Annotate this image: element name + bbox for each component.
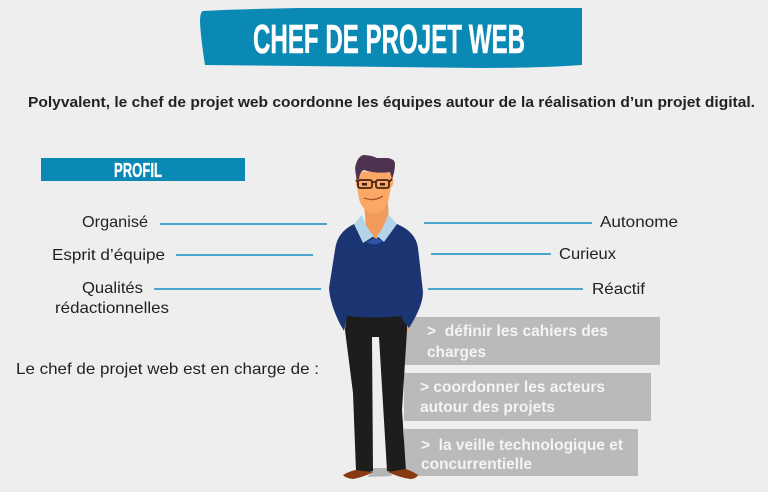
task box: veille technologique: concurrentielle bbox=[421, 456, 532, 473]
subtitle: Polyvalent, le chef de projet web coordonne les équipes autour de la réalisation d’un projet digital. bbox=[28, 94, 755, 111]
text: responsibilities intro: Le chef de projet web est en charge de : bbox=[16, 361, 319, 378]
smile bbox=[364, 196, 383, 200]
hair bbox=[355, 155, 395, 180]
title banner bbox=[200, 8, 582, 68]
sweater bbox=[329, 224, 423, 331]
trousers bbox=[345, 312, 407, 472]
label: Esprit d'équipe: Esprit d’équipe bbox=[52, 247, 165, 264]
task box: coordonner les acteurs: > coordonner les acteurs bbox=[420, 379, 605, 396]
neck bbox=[364, 203, 389, 240]
task box: coordonner les acteurs bbox=[404, 373, 651, 421]
task box: cahiers des charges: charges bbox=[427, 344, 486, 361]
profil heading: PROFIL bbox=[114, 160, 162, 182]
collar left bbox=[354, 215, 374, 243]
right shoe bbox=[388, 469, 418, 479]
collar right bbox=[377, 214, 397, 242]
task box: cahiers des charges: > définir les cahiers des bbox=[427, 323, 608, 340]
left hand bbox=[342, 320, 350, 331]
glasses bbox=[356, 179, 392, 188]
title banner: CHEF DE PROJET WEB bbox=[253, 16, 525, 62]
label: Réactif: Réactif bbox=[592, 281, 646, 298]
label: Qualités rédactionnelles: Qualités bbox=[82, 280, 143, 297]
task box: veille technologique: > la veille technologique et bbox=[421, 437, 623, 454]
profil heading bbox=[41, 158, 245, 182]
task box: coordonner les acteurs: autour des projets bbox=[420, 399, 555, 416]
shoe shadow bbox=[368, 468, 392, 477]
head bbox=[356, 170, 393, 214]
eyes bbox=[362, 183, 367, 186]
neckline bbox=[366, 238, 383, 244]
label: Qualités rédactionnelles: rédactionnelles bbox=[55, 300, 169, 317]
right hand bbox=[402, 316, 410, 333]
label: Autonome: Autonome bbox=[600, 214, 678, 231]
task box: veille technologique bbox=[404, 429, 638, 476]
label: Organisé: Organisé bbox=[82, 214, 148, 231]
label: Qualités rédactionnelles bbox=[55, 280, 321, 317]
illustration: man with glasses bbox=[329, 155, 423, 479]
left shoe bbox=[343, 470, 373, 479]
label: Curieux: Curieux bbox=[559, 246, 616, 263]
task box: cahiers des charges bbox=[405, 317, 660, 365]
